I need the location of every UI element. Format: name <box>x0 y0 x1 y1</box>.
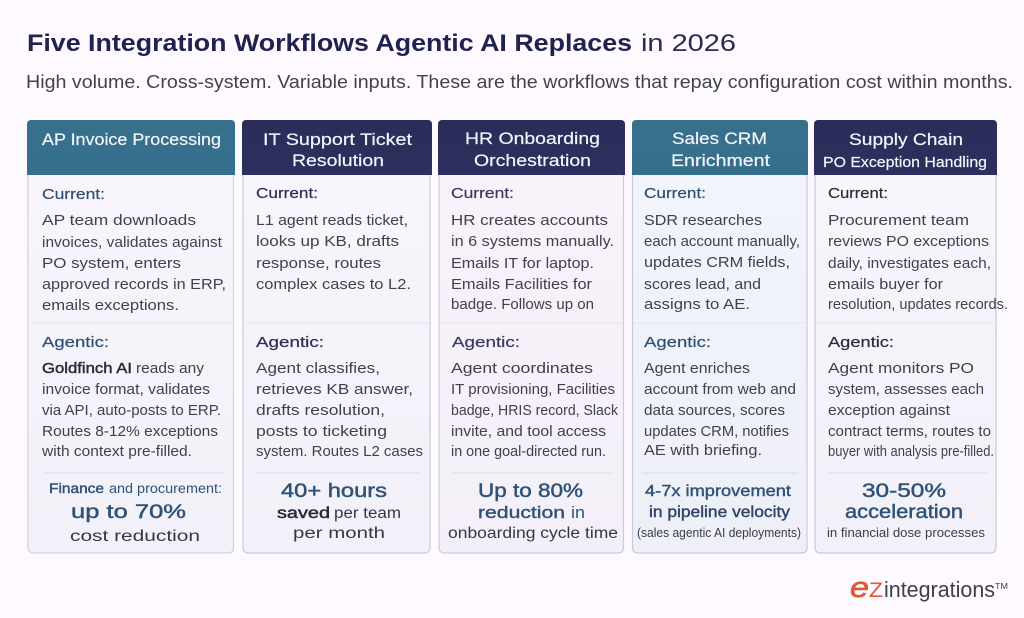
current state text <box>42 186 226 314</box>
agentic state text: Agentic: <box>452 334 520 351</box>
outcome metric: 40+ hours <box>281 481 387 502</box>
agentic state text <box>451 334 619 460</box>
agentic state text: account from web and <box>644 382 796 398</box>
agentic state text <box>644 334 796 459</box>
current state text: scores lead, and <box>644 277 761 293</box>
outcome metric <box>448 481 618 542</box>
agentic state text <box>256 334 423 460</box>
agentic state text: Goldfinch AI <box>42 361 132 377</box>
current state text: Emails IT for laptop. <box>451 256 594 272</box>
logo: eZintegrations <box>850 572 1008 604</box>
panel: Supply Chain PO Exception Handling <box>814 120 1008 553</box>
current state text: badge. Follows up on <box>451 297 594 313</box>
current state text: L1 agent reads ticket, <box>256 213 408 229</box>
outcome metric: saved <box>277 505 330 522</box>
logo: eZintegrations: Z <box>869 579 883 602</box>
agentic state text: system. Routes L2 cases <box>256 444 423 460</box>
current state text: updates CRM fields, <box>644 255 790 271</box>
title: Five Integration Workflows Agentic AI Replaces <box>27 30 632 57</box>
outcome metric: per month <box>293 525 385 542</box>
column header: IT Support Ticket Resolution: IT Support Ticket <box>263 131 412 149</box>
current state text: resolution, updates records. <box>828 297 1008 313</box>
outcome metric: per team <box>334 505 401 522</box>
outcome metric: reduction <box>478 503 565 522</box>
current state text: emails exceptions. <box>42 298 179 314</box>
current state text: looks up KB, drafts <box>256 234 399 250</box>
panel: AP Invoice Processing <box>27 120 235 553</box>
agentic state text <box>41 334 221 460</box>
panel: HR Onboarding Orchestration <box>438 120 625 553</box>
outcome metric: in <box>571 504 585 522</box>
agentic state text: retrieves KB answer, <box>256 382 413 398</box>
current state text: Emails Facilities for <box>451 277 592 293</box>
current state text: each account manually, <box>644 234 800 250</box>
column header: Sales CRM Enrichment <box>632 120 808 175</box>
agentic state text: Agentic: <box>644 334 711 351</box>
outcome metric <box>827 481 985 540</box>
agentic state text: posts to ticketing <box>256 424 387 440</box>
current state text: Procurement team <box>828 213 969 229</box>
outcome metric <box>637 483 801 540</box>
agentic state text: Agent coordinates <box>451 361 593 377</box>
panel: IT Support Ticket Resolution <box>242 120 432 553</box>
column header: Supply Chain PO Exception Handling <box>814 120 997 175</box>
agentic state text: system, assesses each <box>828 382 984 398</box>
agentic state text: buyer with analysis pre-filled. <box>828 444 994 460</box>
current state text: HR creates accounts <box>451 213 608 229</box>
column header: IT Support Ticket Resolution <box>242 120 432 175</box>
logo: eZintegrations: e <box>850 572 869 604</box>
column header: AP Invoice Processing: AP Invoice Processing <box>42 131 221 149</box>
column header: AP Invoice Processing <box>27 120 235 175</box>
outcome metric <box>49 481 222 545</box>
current state text: complex cases to L2. <box>256 277 411 293</box>
current state text: daily, investigates each, <box>828 256 991 272</box>
column header: Supply Chain PO Exception Handling: PO Exception Handling <box>823 154 987 171</box>
agentic state text: IT provisioning, Facilities <box>451 382 615 398</box>
outcome metric: in financial dose processes <box>827 526 985 540</box>
current state text: response, routes <box>256 256 381 272</box>
outcome metric: onboarding cycle time <box>448 525 618 542</box>
current state text: approved records in ERP, <box>42 277 226 293</box>
subtitle: High volume. Cross-system. Variable inputs. These are the workflows that repay configuration cost within months. <box>26 72 1013 92</box>
outcome metric: (sales agentic AI deployments) <box>637 526 801 540</box>
agentic state text: in one goal-directed run. <box>451 444 606 460</box>
agentic state text: Agentic: <box>42 334 109 351</box>
agentic state text: updates CRM, notifies <box>644 424 789 440</box>
agentic state text: Routes 8-12% exceptions <box>42 424 218 440</box>
agentic state text: Agent classifies, <box>256 361 380 377</box>
column header: HR Onboarding Orchestration: HR Onboarding <box>465 130 600 148</box>
agentic state text: Agent enriches <box>644 361 750 377</box>
column header: IT Support Ticket Resolution: Resolution <box>292 152 384 170</box>
current state text: assigns to AE. <box>644 297 750 313</box>
current state text: Current: <box>451 185 514 202</box>
agentic state text: Agentic: <box>828 334 894 351</box>
current state text: Current: <box>644 185 706 202</box>
agentic state text: Agent monitors PO <box>828 361 974 377</box>
agentic state text: AE with briefing. <box>644 443 762 459</box>
current state text <box>828 185 1008 313</box>
current state text <box>644 185 800 313</box>
agentic state text: invoice format, validates <box>42 382 210 398</box>
column header: Supply Chain PO Exception Handling: Supply Chain <box>849 131 963 149</box>
agentic state text: via API, auto-posts to ERP. <box>42 403 221 419</box>
logo: eZintegrations: integrations <box>884 577 995 602</box>
current state text: PO system, enters <box>42 256 181 272</box>
current state text: Current: <box>828 185 888 202</box>
agentic state text: with context pre-filled. <box>41 444 192 460</box>
outcome metric: and procurement: <box>109 481 222 496</box>
agentic state text <box>828 334 994 460</box>
outcome metric: Finance <box>49 481 104 496</box>
outcome metric: in pipeline velocity <box>649 504 790 521</box>
outcome metric: 30-50% <box>862 481 946 502</box>
agentic state text: drafts resolution, <box>256 403 385 419</box>
column header: HR Onboarding Orchestration: Orchestration <box>474 152 591 170</box>
agentic state text: contract terms, routes to <box>828 424 991 440</box>
agentic state text: invite, and tool access <box>451 424 606 440</box>
agentic state text: badge, HRIS record, Slack <box>451 403 619 419</box>
current state text: emails buyer for <box>828 277 943 293</box>
current state text <box>256 185 411 293</box>
outcome metric <box>277 481 401 542</box>
agentic state text: reads any <box>136 361 205 377</box>
current state text: reviews PO exceptions <box>828 234 989 250</box>
agentic state text: data sources, scores <box>644 403 785 419</box>
logo: eZintegrations: TM <box>995 581 1008 591</box>
current state text: SDR researches <box>644 213 762 229</box>
column header: Sales CRM Enrichment: Sales CRM <box>672 130 767 148</box>
column header: HR Onboarding Orchestration <box>438 120 625 175</box>
agentic state text: Agentic: <box>256 334 324 351</box>
outcome metric: 4-7x improvement <box>645 483 792 500</box>
current state text: Current: <box>256 185 318 202</box>
title: in 2026 <box>641 30 736 57</box>
column header: Sales CRM Enrichment: Enrichment <box>671 152 770 170</box>
agentic state text: exception against <box>828 403 950 419</box>
outcome metric: acceleration <box>845 502 963 523</box>
outcome metric: cost reduction <box>70 528 200 545</box>
current state text: invoices, validates against <box>42 235 222 251</box>
outcome metric: up to 70% <box>71 502 186 523</box>
current state text: Current: <box>42 186 105 203</box>
panel: Sales CRM Enrichment <box>632 120 808 553</box>
current state text <box>451 185 614 313</box>
current state text: in 6 systems manually. <box>451 234 614 250</box>
outcome metric: Up to 80% <box>478 481 583 502</box>
current state text: AP team downloads <box>42 213 196 229</box>
